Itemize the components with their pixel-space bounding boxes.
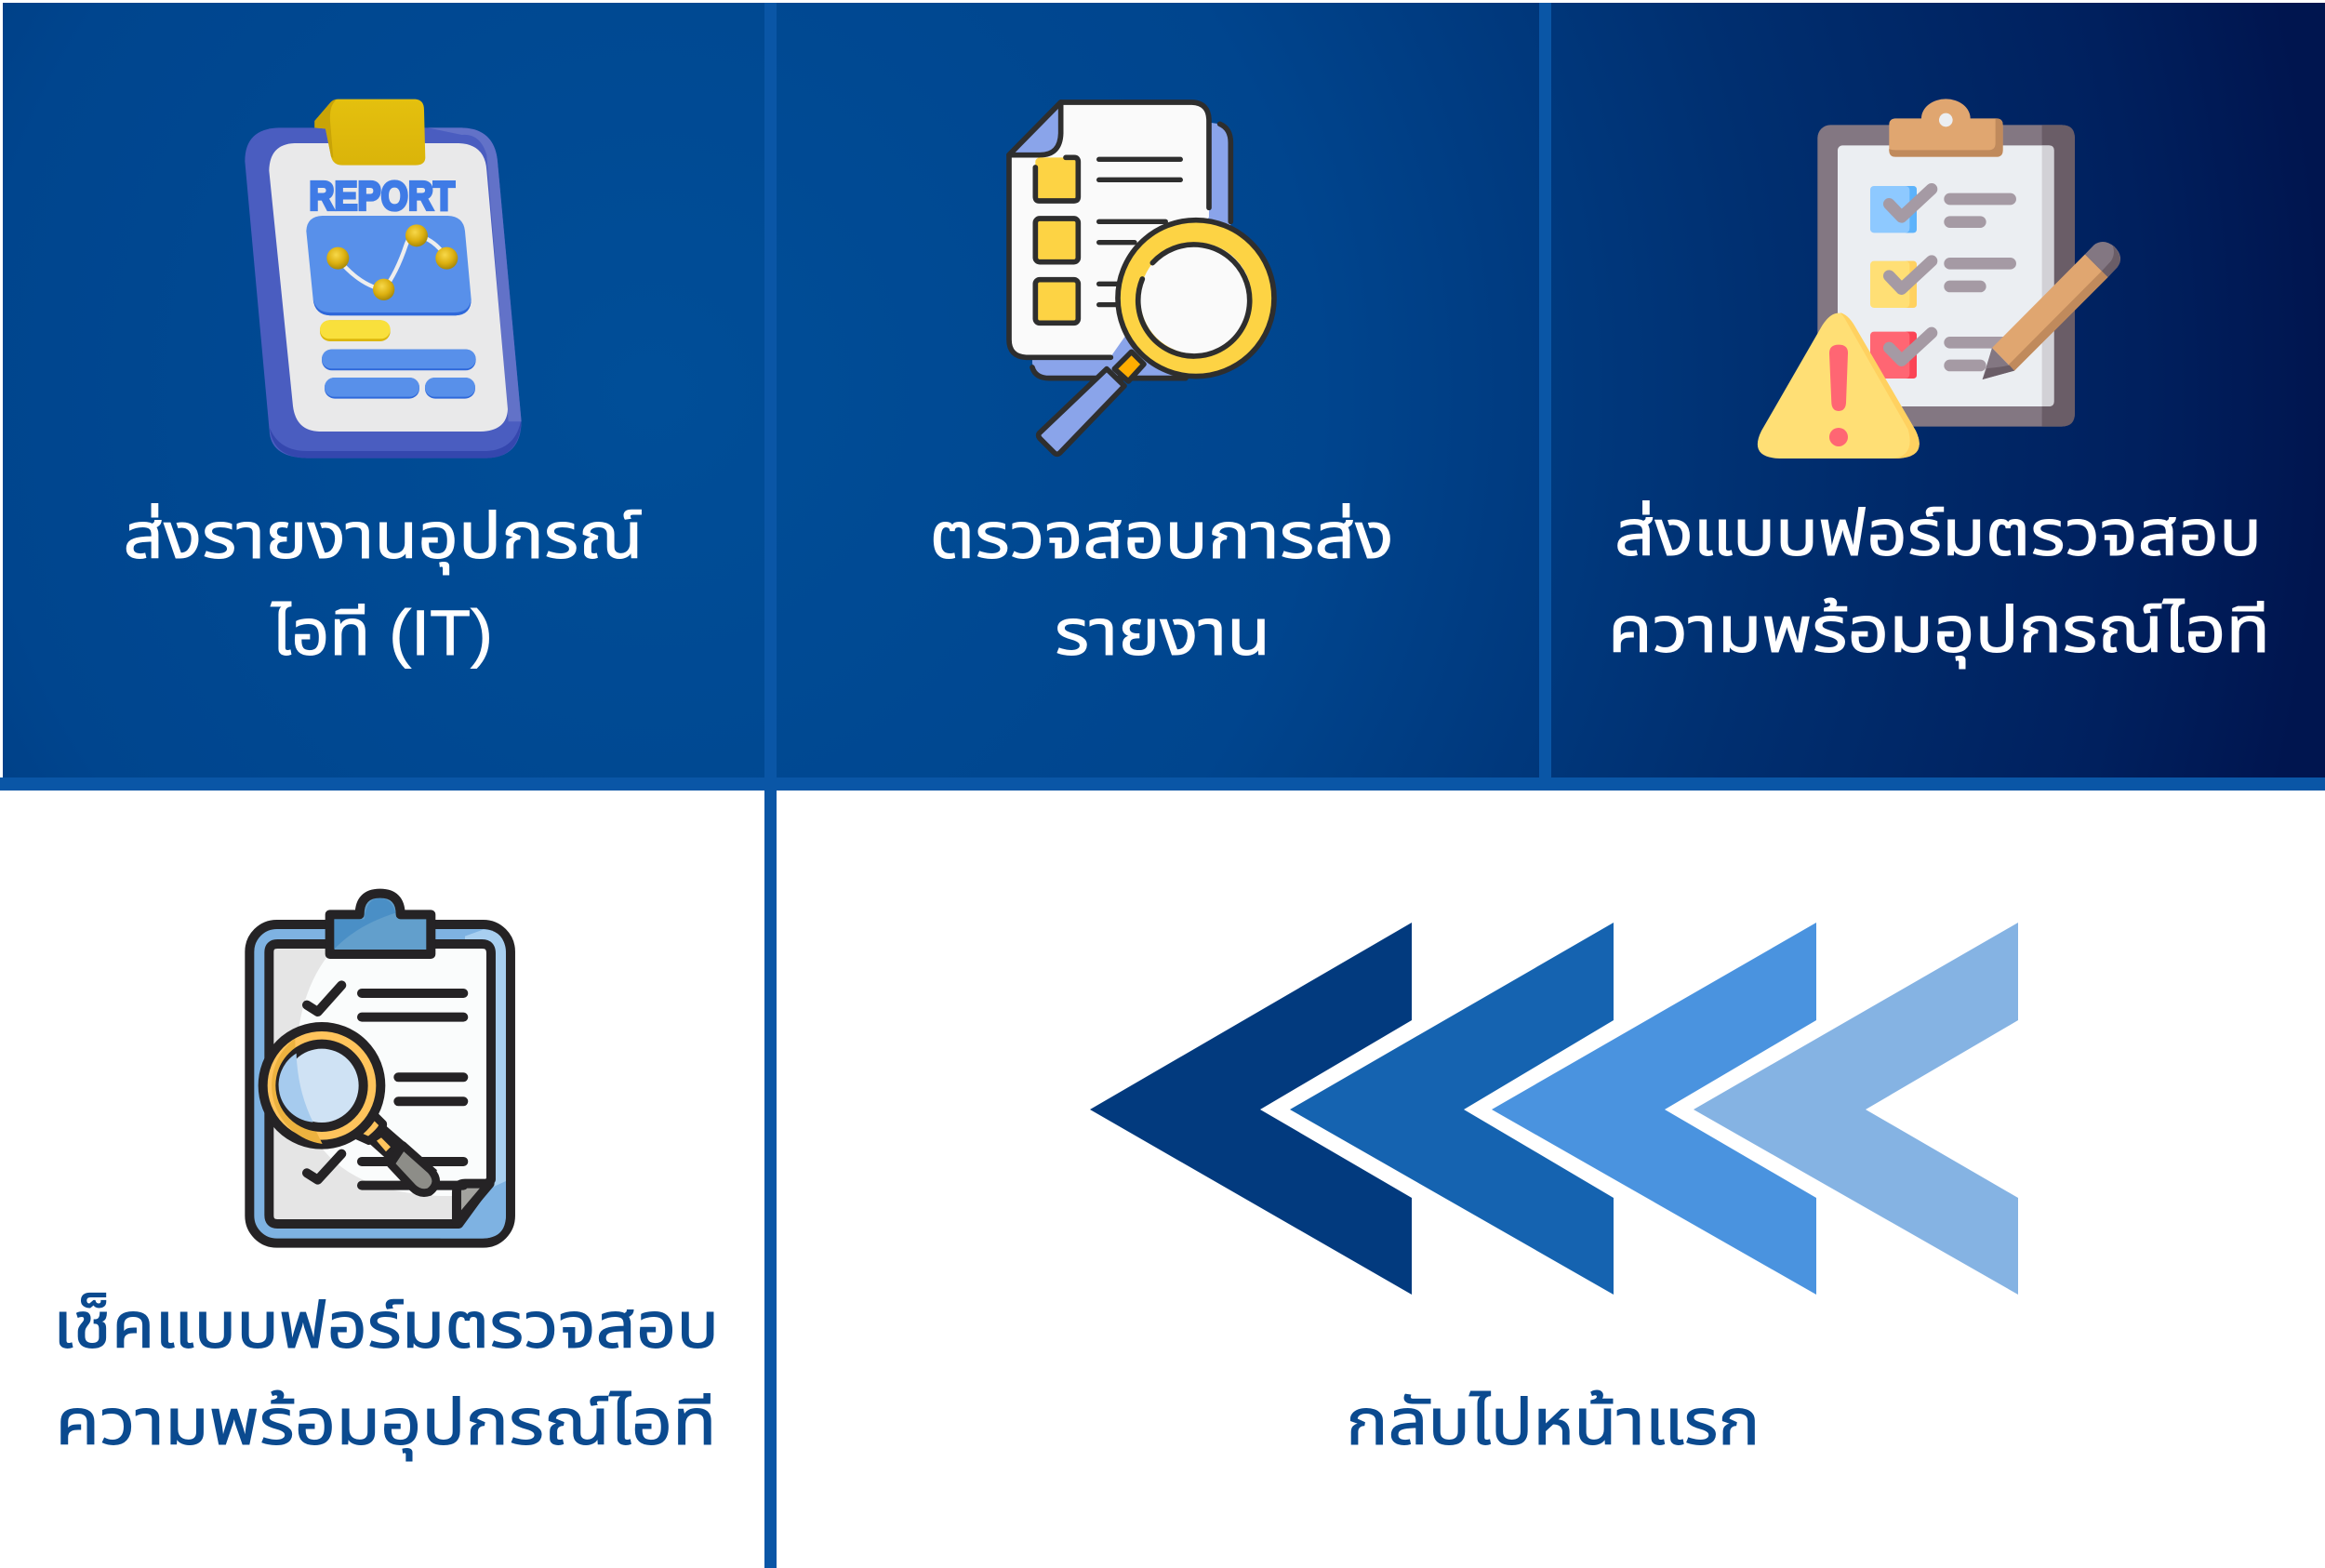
icon: four back chevrons: [1090, 923, 2018, 1295]
panel: back to home: [1090, 923, 2018, 1458]
chevron 2: [1290, 923, 1614, 1295]
label: send IT report: ไอที (IT): [271, 597, 493, 669]
icon: 3D report clipboard: REPORT: [309, 174, 455, 219]
label: send readiness form: ส่งแบบฟอร์มตรวจสอบ: [1614, 498, 2262, 569]
label: check report submission: [930, 500, 1393, 669]
panel: send IT equipment report: [123, 100, 644, 669]
label: send readiness form: [1608, 498, 2270, 669]
icon: clipboard checklist with warning and pencil: [1758, 99, 2120, 458]
label: check readiness form: ความพร้อมอุปกรณ์ไอที: [56, 1387, 716, 1461]
label: back to home: กลับไปหน้าแรก: [1347, 1387, 1760, 1458]
label: check report submission: ตรวจสอบการส่ง: [930, 500, 1393, 572]
icon: 3D report clipboard: [245, 100, 522, 458]
label: send IT report: [123, 500, 644, 669]
panel: dark blue top band: [3, 3, 2325, 778]
panel: check report submission: [930, 102, 1393, 669]
label: check readiness form: เช็คแบบฟอร์มตรวจสอบ: [53, 1290, 719, 1362]
chevron 4: [1694, 923, 2018, 1295]
label: check readiness form: [53, 1290, 719, 1461]
icon: clipboard with magnifier: [249, 894, 511, 1243]
panel: check readiness form: [53, 894, 719, 1461]
icon: document with magnifier: [1009, 102, 1274, 454]
panel: send IT readiness form: [1608, 99, 2270, 669]
label: send readiness form: ความพร้อมอุปกรณ์ไอที: [1608, 594, 2270, 669]
label: check report submission: รายงาน: [1055, 597, 1270, 669]
label: send IT report: ส่งรายงานอุปกรณ์: [123, 500, 644, 575]
chevron 1: [1090, 923, 1412, 1295]
chevron 3: [1492, 923, 1816, 1295]
